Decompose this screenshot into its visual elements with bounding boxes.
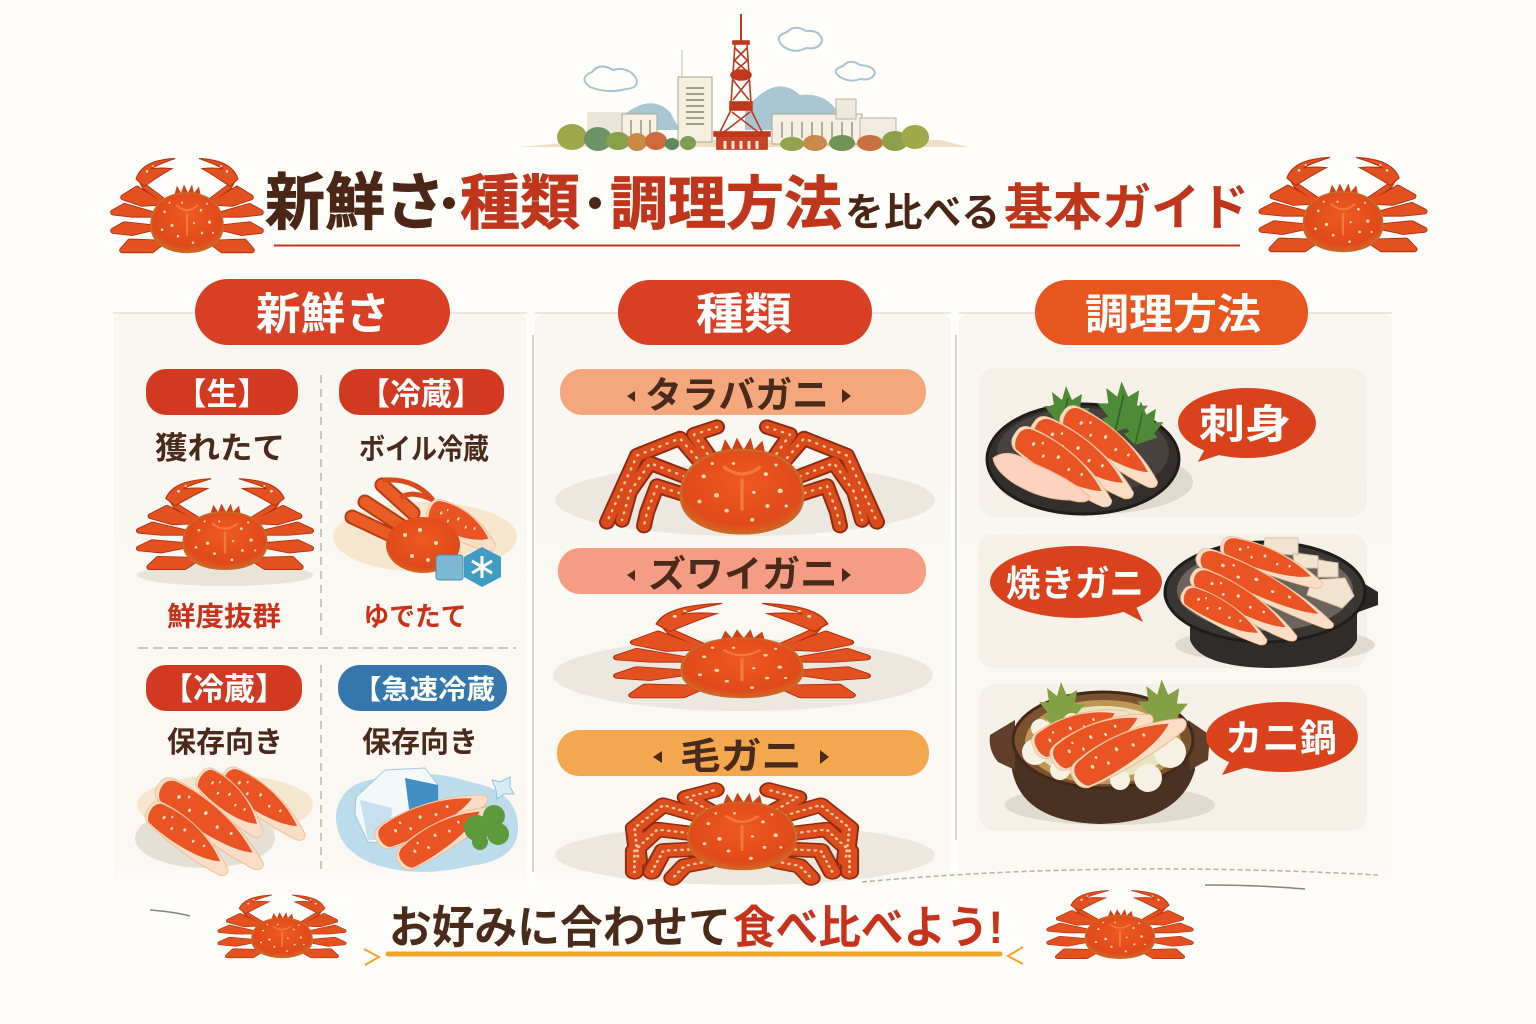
- icon: crab: [139, 479, 311, 569]
- card: raw: 鮮度抜群: [167, 602, 281, 632]
- speech bubble: crab hot pot: カニ鍋: [1225, 718, 1337, 759]
- icon: king crab: [607, 427, 877, 533]
- heading: freshness: 新鮮さ: [256, 290, 390, 339]
- icon: grilled crab pan: [1164, 533, 1378, 668]
- heading: cooking: [1035, 280, 1308, 345]
- heading: species: 種類: [696, 290, 792, 339]
- icon: crab bottom right: [1049, 891, 1191, 958]
- trees: [557, 124, 929, 151]
- card: raw: 【生】: [176, 377, 268, 412]
- card: chilled: [135, 665, 318, 879]
- card: chilled: 保存向き: [167, 726, 283, 759]
- card: raw: [137, 369, 313, 632]
- illustration: Sapporo skyline: [518, 14, 968, 151]
- footer message: [364, 902, 1023, 965]
- title: 基本ガイド: [1004, 180, 1249, 236]
- speech bubble: sashimi: 刺身: [1199, 403, 1291, 447]
- icon: clouds: [584, 28, 875, 91]
- title: 種類: [460, 170, 580, 237]
- icon: crab legs: [138, 762, 318, 879]
- speech bubble: crab hot pot: [1206, 702, 1358, 775]
- icon: sashimi plate: [987, 381, 1179, 514]
- icon: snow crab: [618, 603, 866, 697]
- card: sashimi: [979, 368, 1367, 517]
- panel: cooking: [956, 280, 1392, 903]
- icon: hairy crab: [634, 790, 850, 878]
- species: king crab: [555, 369, 935, 536]
- card: boiled chilled: ゆでたて: [364, 602, 466, 632]
- species: snow crab: [553, 548, 933, 711]
- icon: TV tower: [714, 14, 770, 149]
- speech bubble: grilled crab: [990, 546, 1162, 622]
- icon: crab top left: [113, 158, 261, 252]
- card: raw: 獲れたて: [155, 431, 285, 466]
- title: 調理方法: [610, 172, 842, 237]
- species: snow crab: ズワイガニ: [648, 554, 838, 595]
- panel: species: [533, 280, 951, 903]
- species: hairy crab: [555, 730, 935, 885]
- card: quick frozen: [336, 665, 518, 878]
- species: king crab: タラバガニ: [645, 375, 829, 416]
- speech bubble: sashimi: [1178, 388, 1316, 462]
- card: boiled chilled: [333, 369, 517, 632]
- card: crab hot pot: [979, 679, 1367, 831]
- card: boiled chilled: ボイル冷蔵: [359, 433, 489, 466]
- speech bubble: grilled crab: 焼きガニ: [1006, 563, 1144, 604]
- title: 新鮮さ: [265, 169, 445, 238]
- heading: freshness: [195, 279, 450, 345]
- title: を比べる: [845, 192, 1000, 235]
- icon: crab top right: [1262, 157, 1424, 251]
- panel: freshness: [113, 279, 527, 903]
- icon: frozen crab with ice: [355, 768, 514, 878]
- heading: cooking: 調理方法: [1085, 291, 1261, 338]
- card: quick frozen: 【急速冷蔵: [353, 675, 495, 705]
- card: quick frozen: 保存向き: [362, 726, 478, 759]
- heading: species: [618, 280, 872, 345]
- footer message: お好みに合わせて: [389, 902, 731, 953]
- icon: boiled crab with ice: [352, 480, 504, 587]
- icon: crab bottom left: [220, 895, 344, 958]
- species: hairy crab: 毛ガニ: [680, 736, 802, 777]
- card: grilled crab: [978, 533, 1378, 668]
- footer message: 食べ比べよう!: [733, 902, 1003, 953]
- card: chilled: 【冷蔵】: [162, 672, 286, 707]
- icon: crab hot pot: [990, 679, 1210, 824]
- title: [265, 169, 1249, 238]
- card: boiled chilled: 【冷蔵】: [359, 377, 483, 412]
